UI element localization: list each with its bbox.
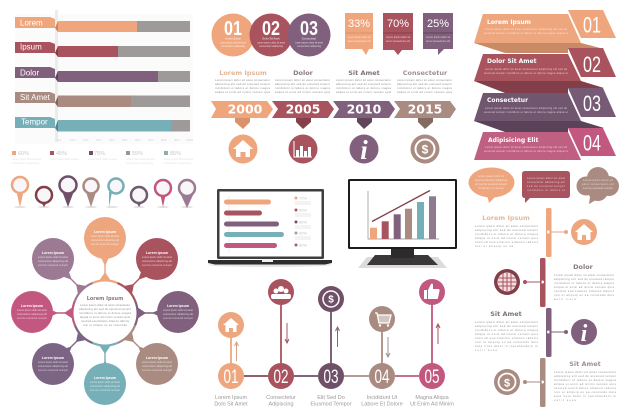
column: 2010: [333, 69, 395, 165]
satellite: upper right: [136, 238, 178, 280]
callout 25%: [423, 13, 453, 55]
bubble: rounded rectangle: [522, 171, 570, 203]
circle 01: consectetur adipiscing: [221, 45, 246, 48]
item: Dolor: Lorem ipsum dolor sit amet consectetur: [554, 273, 614, 277]
bubble: oval: Lorem ipsum dolor sit: [478, 175, 504, 178]
item: Dolor: nisi ut aliquip ex ea commodo duis: [554, 293, 615, 297]
column: 2010: 2010: [347, 102, 382, 116]
item: Lorem Ipsum: incididunt ut labore et dolore magna: [475, 232, 538, 236]
step 05: 05: [424, 367, 440, 388]
item: Dolor: incididunt ut labore et dolore magna: [554, 281, 614, 285]
axis labels: 0%: [57, 138, 62, 142]
item: Sit Amet (dollar): Lorem ipsum dolor sit amet consectetur: [554, 370, 616, 374]
ribbon 03: eiusmod tempor incididunt ut labore et dolore magna aliqua ut: [484, 111, 568, 114]
column: 2005: incididunt ut labore et dolore magna: [275, 86, 330, 90]
circle 03: consectetur adipiscing: [297, 45, 322, 48]
centre circle: nisi ut aliquip ex ea commodo: [83, 323, 128, 327]
bubble: rounded rectangle: incididunt ut labore et: [527, 189, 565, 192]
satellite: lower right: consectetur adipiscing elit: [142, 365, 172, 368]
bubble: oval: amet consectetur adipiscing: [475, 179, 508, 182]
callout 33%: Lorem ipsum dolor sit: [348, 36, 371, 39]
legend: Lorem ipsum dolor sit amet: [12, 158, 41, 161]
circle 01: [212, 14, 254, 56]
centre circle: adipiscing elit sed do eiusmod tempor: [79, 307, 131, 311]
item: Lorem Ipsum: Lorem Ipsum: [482, 214, 530, 222]
bar row: Sit Amet: [15, 92, 190, 107]
item: Sit Amet (dollar): [494, 358, 617, 407]
satellite: bottom: consectetur adipiscing elit: [90, 385, 120, 388]
column: 2015: [394, 69, 456, 164]
bubble: cloud: Lorem ipsum dolor sit: [583, 179, 613, 182]
step 02: [266, 279, 296, 408]
axis labels: [57, 138, 194, 142]
ribbon 04: Lorem ipsum dolor sit amet consectetur adipiscing elit sed do: [485, 146, 568, 149]
bar row: Sit Amet: Sit Amet: [20, 93, 51, 102]
bar row: Lorem: [15, 17, 190, 32]
axis labels: 20%: [83, 138, 89, 142]
axis labels: 30%: [96, 138, 102, 142]
circle 03: [288, 14, 330, 56]
ribbon 02: 02: [583, 52, 601, 77]
step 02: 02: [274, 367, 288, 388]
satellite: upper right: Lorem Ipsum: [146, 251, 168, 255]
satellite: lower left: Lorem ipsum dolor sit amet: [38, 361, 68, 364]
axis labels: 60%: [135, 138, 141, 142]
item: Sit Amet (info): adipiscing elit sed do eiusmod tempor: [475, 324, 538, 328]
step 05: Magna Aliqua: [415, 395, 450, 401]
item: Dolor: adipiscing elit sed do eiusmod tempor: [554, 277, 614, 281]
step 04: Labore Et Dolore: [361, 402, 403, 408]
item: Sit Amet (dollar): adipiscing elit sed do eiusmod tempor: [554, 374, 616, 378]
satellite: upper left: Lorem ipsum dolor sit amet: [38, 256, 68, 259]
item: Sit Amet (info): incididunt ut labore et dolore magna: [475, 328, 538, 332]
bubble: rounded rectangle: Lorem ipsum dolor sit amet: [527, 177, 565, 180]
column: 2000: incididunt ut labore et dolore magna: [215, 86, 270, 90]
callout 33%: amet consectetur elit: [348, 40, 371, 43]
item: Sit Amet (dollar): $: [504, 378, 510, 390]
bubble: cloud: sed do eiusmod tempor: [583, 187, 613, 190]
pin 2: [36, 187, 52, 207]
legend: consectetur adipiscing: [126, 162, 154, 165]
callout 70%: [383, 13, 413, 55]
item: Lorem Ipsum: [475, 208, 597, 257]
item: Lorem Ipsum: adipiscing elit sed do eiusmod tempor: [475, 228, 538, 232]
bubble: rounded rectangle: sed do eiusmod tempor: [527, 185, 565, 188]
step 01: [214, 312, 248, 408]
panel: horizontal bar chart: [12, 10, 194, 165]
step 01: Lorem Ipsum: [215, 395, 247, 401]
satellite: upper left: Lorem Ipsum: [42, 251, 64, 255]
satellite: top: sed do eiusmod tempor: [91, 243, 119, 246]
legend: 75%: [94, 151, 105, 157]
pin 6: [131, 187, 147, 207]
panel: three overlapping numbered circles: [212, 14, 330, 56]
column: 2000: Lorem ipsum dolor sit amet consectetur: [215, 78, 270, 82]
callout 25%: 25%: [427, 18, 449, 30]
satellite: left: consectetur adipiscing elit: [17, 313, 47, 316]
column: 2015: Consectetur: [403, 69, 448, 77]
satellite: lower right: [136, 343, 178, 385]
laptop bars: [224, 200, 284, 248]
item: Sit Amet (dollar): incididunt ut labore et dolore magna: [554, 378, 616, 382]
panel: map pins: [12, 176, 195, 208]
icon: bar chart: [288, 134, 318, 164]
panel: year timeline: [211, 69, 456, 165]
item: Dolor: Dolor: [573, 263, 594, 271]
item: Sit Amet (info): [475, 308, 597, 357]
circle 02: Lorem ipsum dolor sit amet: [257, 42, 285, 44]
circle 02: consectetur adipiscing: [259, 45, 284, 48]
step 04: [361, 306, 403, 408]
satellite: top: Lorem Ipsum: [94, 230, 116, 234]
trend line: [372, 190, 430, 222]
satellite: right: Lorem Ipsum: [167, 304, 189, 308]
column: 2010: adipiscing elit sed do eiusmod tempor: [336, 82, 391, 86]
satellite: lower left: [32, 343, 74, 385]
satellite: lower left: consectetur adipiscing elit: [38, 365, 68, 368]
step 03: [310, 286, 352, 408]
satellite: bottom: [84, 363, 126, 405]
axis labels: 90%: [174, 138, 180, 142]
panel: numbered ribbons: [474, 10, 616, 160]
connectors: [50, 258, 160, 368]
ribbon 04: Adipisicing Elit: [488, 137, 538, 144]
laptop legend: 82%: [299, 242, 307, 248]
axis labels: 100%: [186, 138, 194, 142]
item: Sit Amet (info): nostrud exercitation ullamco laboris: [475, 336, 539, 340]
item: Sit Amet (info): aute irure dolor in reprehenderit in: [475, 344, 538, 348]
column: 2015: adipiscing elit sed do eiusmod tempor: [397, 82, 452, 86]
pin 3: [60, 176, 76, 207]
column: 2015: Lorem ipsum dolor sit amet consectetur: [397, 78, 452, 82]
panel: speech bubbles: [468, 167, 619, 204]
satellite: bottom: Lorem Ipsum: [94, 376, 116, 380]
panel: five-step timeline: [214, 279, 454, 408]
legend: consectetur adipiscing: [164, 162, 192, 165]
item: Sit Amet (dollar): nostrud exercitation ullamco laboris: [554, 386, 617, 390]
item: Lorem Ipsum: Lorem ipsum dolor sit amet consectetur: [475, 224, 538, 228]
pin 7: [155, 180, 171, 207]
satellite: left: sed do eiusmod tempor: [17, 317, 47, 320]
ribbon 04: [474, 128, 616, 160]
chart bars: [370, 196, 436, 239]
axis labels: 50%: [122, 138, 128, 142]
ribbon 02: Dolor Sit Amet: [487, 58, 537, 65]
item: Sit Amet (dollar): velit esse: [554, 398, 576, 402]
bubble: oval: incididunt ut labore: [478, 187, 505, 190]
column: 2005: [272, 69, 334, 164]
axis labels: 10%: [70, 138, 76, 142]
step 03: $: [328, 294, 334, 306]
bar row: Ipsum: [15, 42, 190, 57]
satellite: upper left: consectetur adipiscing elit: [38, 260, 68, 263]
satellite: bottom: Lorem ipsum dolor sit amet: [90, 381, 120, 384]
bar row: Dolor: Dolor: [20, 68, 39, 78]
satellite: lower right: Lorem ipsum dolor sit amet: [142, 361, 172, 364]
circle 02: [250, 14, 292, 56]
icon: info: i: [360, 135, 368, 165]
item: Sit Amet (info): nisi ut aliquip ex ea commodo duis: [475, 340, 539, 344]
legend: Lorem ipsum dolor sit amet: [164, 158, 193, 161]
callout 25%: Lorem ipsum dolor sit: [426, 36, 450, 39]
bar row: Dolor: [15, 67, 190, 82]
item: Sit Amet (info): i: [581, 321, 588, 347]
legend: Lorem ipsum dolor sit amet: [126, 158, 155, 161]
satellite: upper left: [32, 238, 74, 280]
bar row: Lorem: Lorem: [20, 18, 43, 28]
circle 03: Consectetur: [302, 38, 316, 40]
satellite: lower right: sed do eiusmod tempor: [142, 369, 172, 372]
centre circle: aliqua ut enim ad minim veniam quis: [80, 315, 131, 319]
laptop legend: [294, 196, 311, 248]
ribbon 03: 03: [583, 91, 601, 116]
ribbon 01: 01: [583, 12, 601, 38]
item: Sit Amet (dollar): aute irure dolor in reprehenderit in: [554, 394, 616, 398]
item: Dolor: nostrud exercitation ullamco laboris: [554, 289, 615, 293]
legend: 55%: [132, 151, 143, 157]
satellite: upper right: Lorem ipsum dolor sit amet: [142, 256, 172, 259]
circle 02: 02: [262, 18, 280, 40]
bar row: Tempor: [15, 117, 190, 132]
callout 33%: [345, 13, 373, 55]
callout 70%: amet consectetur elit: [386, 40, 410, 43]
panel: monitor with growth chart: [348, 179, 457, 268]
legend: [12, 151, 193, 165]
bubble: oval: elit sed do eiusmod tempor: [475, 183, 507, 186]
circle 01: 01: [224, 18, 242, 40]
item: Lorem Ipsum: aliqua ut enim ad minim veniam quis: [475, 236, 539, 240]
ribbon 04: eiusmod tempor incididunt ut labore et dolore magna aliqua ut: [484, 150, 568, 153]
column: 2000: adipiscing elit sed do eiusmod tempor: [215, 82, 270, 86]
panel: circle diagram: [11, 217, 199, 405]
callout 33%: 33%: [348, 18, 370, 30]
circle 01: Lorem ipsum dolor sit amet: [220, 42, 246, 44]
circle 02: Dolor Sit Amet: [262, 38, 280, 40]
satellite: upper left: sed do eiusmod tempor: [38, 264, 68, 267]
item: Dolor: aute irure: [554, 297, 576, 301]
pin 5: [108, 178, 124, 207]
ribbon 01: eiusmod tempor incididunt ut labore et dolore magna aliqua ut: [484, 32, 568, 35]
laptop legend: 92%: [299, 230, 307, 236]
pin 8: [179, 180, 195, 208]
item: Sit Amet (info): velit esse: [475, 348, 498, 352]
bar row: Tempor: Tempor: [21, 118, 48, 126]
step 03: Eiusmod Tempor: [310, 402, 352, 408]
column: 2000: 2000: [228, 102, 263, 116]
ribbon 02: eiusmod tempor incididunt ut labore et dolore magna aliqua ut: [484, 72, 568, 75]
circle 01: Lorem Ipsum: [225, 38, 242, 40]
item: Sit Amet (info): Sit Amet: [490, 310, 522, 318]
column: 2005: 2005: [286, 102, 320, 116]
chart axes: [368, 191, 439, 239]
laptop legend: 72%: [299, 196, 307, 200]
legend: Lorem ipsum dolor sit amet: [50, 158, 79, 161]
column: 2010: incididunt ut labore et dolore magna: [336, 86, 392, 90]
satellite: top: [84, 217, 126, 259]
column: 2010: Lorem ipsum dolor sit amet consectetur: [336, 78, 391, 82]
item: Sit Amet (info): Lorem ipsum dolor sit amet consectetur: [475, 320, 538, 324]
callout 70%: Lorem ipsum dolor sit: [386, 36, 410, 39]
circle 03: 03: [300, 18, 318, 40]
column: 2005: adipiscing elit sed do eiusmod tempor: [275, 82, 330, 86]
item: Sit Amet (dollar): nisi ut aliquip ex ea commodo duis: [554, 390, 617, 394]
ribbon 03: [474, 88, 616, 132]
step 02: Adipiscing: [268, 402, 294, 408]
column: 2015: 2015: [408, 102, 442, 116]
step 01: 01: [224, 367, 238, 388]
bubble: cloud: amet consectetur elit: [582, 183, 614, 186]
bubble: oval: [468, 168, 514, 203]
laptop legend: 85%: [299, 220, 307, 224]
step 04: 04: [374, 367, 390, 388]
step 03: 03: [324, 367, 338, 388]
satellite: upper right: sed do eiusmod tempor: [142, 264, 172, 267]
legend: Lorem ipsum dolor sit amet: [88, 158, 117, 161]
item: Sit Amet (info): aliqua ut enim ad minim veniam quis: [475, 332, 539, 336]
step 05: Ut Enim Ad Minim: [410, 402, 454, 408]
satellite: top: Lorem ipsum dolor sit amet: [91, 235, 119, 238]
legend: 60%: [18, 151, 29, 157]
satellite: left: Lorem Ipsum: [21, 304, 43, 308]
centre circle: nostrud exercitation ullamco laboris: [81, 319, 130, 323]
ribbon 01: Lorem ipsum dolor sit amet consectetur adipiscing elit sed do: [485, 28, 568, 31]
icon: house: [228, 134, 258, 164]
ribbon 02: [474, 48, 616, 93]
step 01: Dolo Sit Amet: [214, 402, 248, 408]
item: Lorem Ipsum: nisi ut aliquip ex ea: [475, 244, 514, 248]
callout 25%: amet consectetur elit: [426, 40, 450, 43]
column: 2005: aliqua ut enim ad minim veniam quis: [275, 90, 331, 94]
satellite: right: consectetur adipiscing elit: [163, 313, 193, 316]
circle 03: Lorem ipsum dolor sit amet: [295, 42, 323, 44]
item: Dolor: aliqua ut enim ad minim veniam quis: [554, 285, 615, 289]
panel: vertical process timeline: [475, 208, 617, 407]
column: 2010: aliqua ut enim ad minim veniam quis: [336, 90, 392, 94]
axis labels: 40%: [109, 138, 115, 142]
item: Lorem Ipsum: nostrud exercitation ullamco laboris: [475, 240, 539, 244]
ribbon 02: Lorem ipsum dolor sit amet consectetur adipiscing elit sed do: [485, 68, 568, 71]
ribbon 03: Consectetur: [487, 97, 528, 104]
ribbon 04: 04: [583, 130, 601, 156]
legend: 45%: [56, 151, 67, 157]
step 05: [410, 279, 454, 408]
centre circle: [63, 271, 147, 355]
axis labels: 70%: [148, 138, 154, 142]
panel: laptop with bar chart: [208, 189, 332, 267]
legend: consectetur adipiscing: [12, 162, 40, 165]
column: 2000: Lorem Ipsum: [219, 69, 267, 77]
bubble: rounded rectangle: consectetur adipiscing elit: [527, 181, 565, 184]
column: 2000: [211, 69, 273, 164]
column: 2000: aliqua ut enim ad minim veniam quis: [215, 90, 271, 94]
step 03: Elit Sed Do: [317, 395, 345, 401]
ribbon 03: Lorem ipsum dolor sit amet consectetur adipiscing elit sed do: [485, 107, 568, 110]
satellite: right: sed do eiusmod tempor: [163, 317, 193, 320]
item: Dolor: [494, 258, 615, 307]
centre circle: Lorem ipsum dolor sit amet consectetur: [80, 303, 130, 307]
satellite: top: consectetur adipiscing elit: [91, 239, 119, 242]
satellite: lower right: Lorem Ipsum: [146, 356, 168, 360]
bar row: Ipsum: Ipsum: [20, 42, 42, 52]
satellite: bottom: sed do eiusmod tempor: [90, 389, 120, 392]
satellite: lower left: sed do eiusmod tempor: [38, 369, 68, 372]
satellite: right: Lorem ipsum dolor sit amet: [163, 309, 193, 312]
pin shadows: [14, 206, 193, 208]
column: 2005: Lorem ipsum dolor sit amet consectetur: [275, 78, 330, 82]
column: 2010: Sit Amet: [348, 69, 380, 77]
pin 1: [12, 177, 28, 207]
item: Sit Amet (dollar): aliqua ut enim ad minim veniam quis: [554, 382, 617, 386]
column: 2015: incididunt ut labore et dolore magna: [397, 86, 452, 90]
step connectors: [244, 375, 419, 377]
satellite: lower left: Lorem Ipsum: [42, 356, 64, 360]
column: 2005: Dolor: [293, 69, 314, 77]
legend: 85%: [170, 151, 181, 157]
satellite: left: Lorem ipsum dolor sit amet: [17, 309, 47, 312]
satellite: left: [11, 291, 53, 333]
axis labels: 80%: [161, 138, 167, 142]
centre circle: incididunt ut labore et dolore magna: [79, 311, 132, 315]
satellite: upper right: consectetur adipiscing elit: [142, 260, 172, 263]
panel: percentage callout boxes: [345, 13, 453, 55]
step 02: Consectetur: [266, 395, 296, 401]
item: Sit Amet (dollar): Sit Amet: [569, 360, 601, 368]
callout 70%: 70%: [387, 18, 409, 30]
icon: dollar coin: $: [422, 142, 429, 156]
column: 2015: aliqua ut enim ad minim veniam quis: [397, 90, 453, 94]
satellite: right: [157, 291, 199, 333]
centre circle: Lorem Ipsum: [87, 296, 123, 302]
pin 4: [84, 178, 98, 207]
ribbon 01: [474, 10, 616, 53]
bubble: cloud: [576, 167, 619, 204]
ribbon 01: Lorem Ipsum: [487, 19, 531, 26]
step 04: Incididunt Ut: [367, 395, 398, 401]
laptop legend: 50%: [299, 208, 307, 212]
